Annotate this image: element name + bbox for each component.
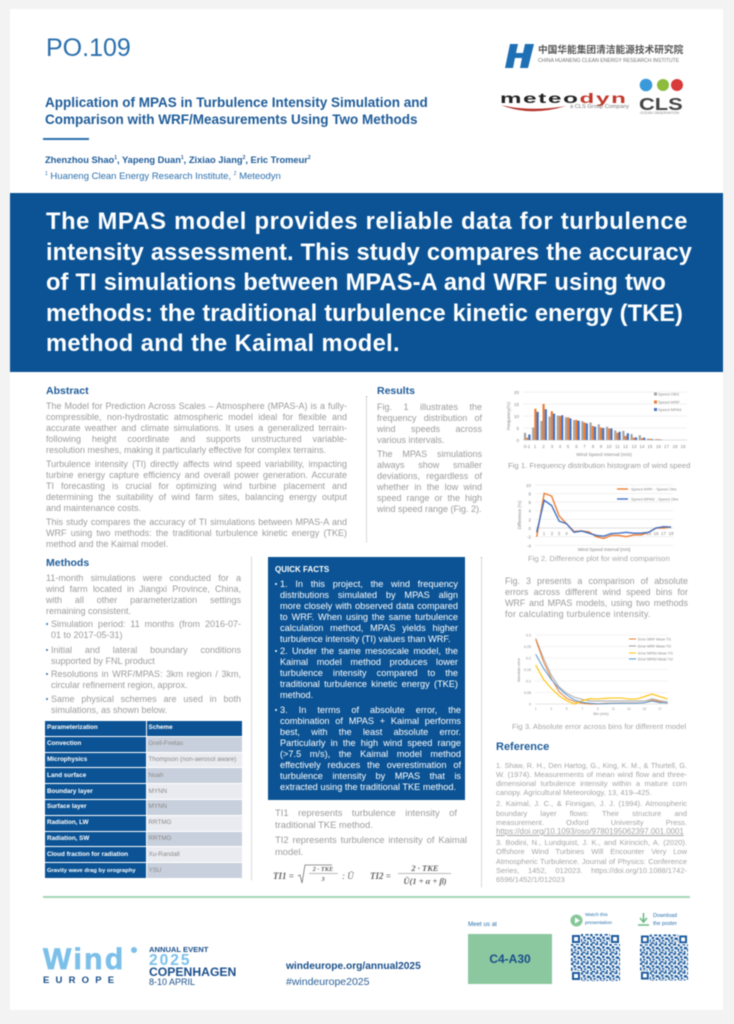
chart: figure 1 frequency histogram: 2 — [542, 444, 545, 449]
chart: figure 1 frequency histogram: Speed OBS — [658, 392, 679, 396]
abstract text: accurate weather and climate simulations. It uses a generalized terrain- — [46, 423, 347, 433]
methods text: Resolutions in WRF/MPAS: 3km region / 3km, — [51, 669, 241, 679]
quick fact 3 — [275, 704, 461, 792]
reference list: 6596/1452/1/012023 — [496, 875, 565, 884]
results text: speed range or the high — [377, 493, 482, 503]
website: windeurope.org/annual2025 — [286, 961, 421, 972]
CLS tagline: OCEAN OBSERVATION — [640, 111, 679, 115]
chart: figure 1 frequency histogram: 12 — [623, 444, 628, 449]
quick fact 3: best, with the least absolute error. — [280, 726, 461, 736]
chart: figure 3 absolute error: Error MPAS Mean TI2 — [638, 657, 673, 661]
banner: key message: intensity assessment. This study compares the accuracy — [46, 240, 692, 266]
chart: figure 2 difference plot: 6 — [528, 500, 531, 505]
chart: figure 1 frequency histogram: 0 — [516, 438, 519, 443]
banner: key message — [10, 193, 723, 372]
poster number: PO.109 — [46, 34, 131, 62]
TI definitions text: TI1 represents turbulence intensity of — [275, 807, 457, 818]
chart: figure 2 difference plot: 4 — [565, 531, 568, 536]
table: parameterization schemes: RRTMG — [148, 819, 171, 826]
table: parameterization schemes: Scheme — [148, 724, 173, 731]
panel: abstract — [46, 385, 348, 549]
table: parameterization schemes: Xu-Randall — [148, 851, 180, 858]
panel: quick facts — [268, 557, 465, 800]
results text — [376, 402, 482, 514]
TI definitions text — [274, 807, 467, 857]
quick fact 2: method. — [280, 690, 313, 700]
figure 3 intro text: for calculating turbulence intensity. — [505, 608, 651, 618]
chart: figure 1 frequency histogram: 18 — [672, 444, 678, 449]
results text: always show smaller — [377, 460, 482, 470]
quick fact 1: calculation method, MPAS yields higher — [280, 622, 458, 632]
results text: wind speed range (Fig. 2). — [377, 504, 482, 514]
CLS letters: CLS — [639, 94, 683, 114]
reference list: Series, 1452, 012023. https://doi.org/10.1088/1742- — [496, 866, 687, 875]
chart: figure 3 absolute error: 13 — [627, 707, 631, 711]
wordmark: Wind: Wind — [43, 943, 126, 976]
table: parameterization schemes: Radiation, LW — [47, 819, 89, 826]
table: parameterization schemes: Convection — [47, 740, 81, 747]
title — [44, 94, 428, 128]
table: parameterization schemes: Parameterization — [47, 724, 98, 731]
reference list: measurement. Oxford University Press. — [496, 818, 687, 827]
icon: play — [570, 914, 584, 928]
chart: figure 1 frequency histogram: Wind Speed Interval (m/s) — [576, 452, 632, 458]
chart: figure 2 difference plot: 3 — [558, 531, 561, 536]
affiliations: 1 Huaneng Clean Energy Research Institute, 2 Meteodyn — [45, 171, 281, 182]
download label: Download — [653, 913, 677, 919]
table: parameterization schemes: MYNN — [148, 788, 167, 795]
chart: figure 2 difference plot: Difference (%) — [517, 500, 522, 529]
chart: figure 1 frequency histogram: 3 — [551, 444, 554, 449]
figure 3 intro text — [504, 576, 688, 620]
table: parameterization schemes: Grell-Freitas — [148, 740, 183, 747]
table: parameterization schemes — [44, 720, 243, 879]
chart: figure 1 frequency histogram: 5 — [567, 444, 570, 449]
chart: figure 1 frequency histogram: 7 — [583, 444, 586, 449]
chart: figure 3 absolute error: 17 — [658, 707, 662, 711]
chart: figure 2 difference plot: 18 — [668, 531, 674, 536]
table: parameterization schemes: Surface layer — [47, 803, 87, 810]
table: parameterization schemes: RRTMG — [148, 835, 171, 842]
table: parameterization schemes: Noah — [148, 772, 164, 779]
chart: figure 3 absolute error: Bin (m/s) — [593, 712, 609, 716]
quick fact 3: effectively reduces the overestimation of — [280, 760, 461, 770]
chart: figure 1 frequency histogram: 14 — [639, 444, 645, 449]
chart: figure 2 difference plot: 2 — [528, 517, 531, 522]
figure 3 intro text: WRF and MPAS models, using two methods — [505, 598, 688, 608]
abstract text: Turbulence intensity (TI) directly affects wind speed variability, impacting — [46, 459, 347, 469]
quick facts heading: QUICK FACTS — [275, 565, 329, 574]
icon: download — [637, 912, 650, 926]
formulas: 2 · TKE — [410, 863, 439, 873]
abstract text: turbine energy capture efficiency and overall power generation. Accurate — [46, 470, 347, 480]
banner: key message: of TI simulations between MPAS-A and WRF using two — [46, 270, 666, 296]
chart: figure 2 difference plot: -2 — [527, 535, 531, 540]
reference list — [496, 760, 688, 884]
quick fact 3: turbulence intensity by MPAS that is — [280, 770, 461, 780]
reference list: Offshore Wind Turbines Will Encounter Very Low — [496, 847, 687, 856]
results text: wind speeds across — [377, 424, 482, 434]
results text: frequency distribution of — [377, 413, 482, 423]
chart: figure 2 difference plot: 2 — [551, 531, 554, 536]
methods text: simulations, as shown below. — [51, 705, 167, 715]
wordmark: meteodyn — [500, 90, 627, 106]
chart: figure 3 absolute error: Error WRF Mean TI2 — [638, 644, 671, 648]
table: parameterization schemes: Thompson (non-aerosol aware) — [148, 756, 236, 763]
chart: figure 1 frequency histogram: 10 — [514, 414, 519, 419]
watch label — [584, 912, 612, 926]
chart: figure 3 absolute error: Absolute error — [517, 657, 521, 682]
abstract text: This study compares the accuracy of TI simulations between MPAS-A and — [46, 517, 347, 527]
formulas: : Ū — [342, 871, 354, 881]
chart: figure 2 difference plot: Wind Speed Interval [m/s] — [578, 547, 630, 552]
methods text: Simulation period: 11 months (from 2016-07- — [51, 619, 241, 629]
banner: key message: The MPAS model provides reliable data for turbulence — [46, 209, 688, 235]
results text: Fig. 1 illustrates the — [377, 402, 482, 412]
chart: figure 2 difference plot: 4 — [528, 509, 531, 514]
download label — [652, 912, 678, 927]
Chinese name: 中国华能集团清洁能源技术研究院 — [538, 45, 683, 56]
chart: figure 3 absolute error: 0.3 — [526, 634, 531, 638]
chart: figure 1 frequency histogram: 8 — [592, 444, 595, 449]
table: parameterization schemes: Gravity wave drag by orography — [47, 868, 136, 874]
watch label: Watch this — [585, 913, 608, 918]
logo: China Huaneng — [504, 43, 684, 69]
hashtag: #windeurope2025 — [286, 976, 370, 988]
heading: reference: Reference — [496, 741, 549, 753]
quick fact 2: turbulence intensity compared to the — [280, 668, 458, 678]
download label: the poster — [653, 921, 677, 927]
quick fact 3: (>7.5 m/s), the Kaimal model method — [280, 748, 461, 758]
chart: figure 1 frequency histogram: 11 — [615, 444, 620, 449]
quick fact 3: 3. In terms of absolute error, the — [280, 704, 461, 714]
quick fact 3: combination of MPAS + Kaimal performs — [280, 716, 461, 726]
caption: figure 3: Fig 3. Absolute error across bins for different model — [512, 722, 686, 731]
authors: Zhenzhou Shao1, Yapeng Duan1, Zixiao Jiang2, Eric Tromeur2 — [45, 155, 311, 165]
reference list: 1. Shaw, R. H., Den Hartog, G., King, K. M., & Thurtell, G. — [496, 760, 687, 770]
quick fact 2 — [275, 646, 458, 700]
title: Comparison with WRF/Measurements Using Two Methods — [45, 112, 418, 126]
methods text: with all other parameterization settings — [46, 595, 241, 605]
panel: results text — [376, 385, 482, 514]
formulas: 2 · TKE — [312, 866, 334, 873]
quick fact 1: 1. In this project, the wind frequency — [280, 578, 458, 588]
icon: Huaneng H mark — [504, 43, 535, 69]
chart: figure 3 absolute error: 0.2 — [526, 656, 531, 660]
quick fact 1: to WRF. When using the same turbulence — [280, 612, 458, 622]
formulas: Ū(1 + α + β) — [403, 876, 447, 886]
abstract text: compressible, non-hydrostatic atmospheric model ideal for flexible and — [46, 412, 347, 422]
methods text: 11-month simulations were conducted for a — [46, 573, 241, 583]
quick fact 2: traditional turbulence kinetic energy (TKE) — [280, 678, 458, 688]
wind dot — [131, 947, 137, 953]
results text: whether in the low wind — [377, 482, 482, 492]
table: parameterization schemes: Boundary layer — [47, 788, 93, 795]
TI definitions text: traditional TKE method. — [275, 819, 373, 830]
TI definitions text: model. — [275, 846, 303, 857]
title: Application of MPAS in Turbulence Intensity Simulation and — [45, 94, 428, 110]
chart: figure 1 frequency histogram: 17 — [664, 444, 669, 449]
chart: figure 1 frequency histogram: 15 — [514, 402, 519, 407]
chart: figure 2 difference plot: 8 — [528, 492, 531, 496]
chart: figure 2 difference plot: 1 — [543, 531, 546, 536]
abstract text: following height coordinate and supports unstructured variable- — [46, 434, 347, 444]
reference list: canopy. Agricultural Meteorology, 13, 419–425. — [496, 788, 652, 797]
chart: figure 1 frequency histogram: Speed MPAS — [658, 407, 682, 412]
abstract text: WRF using two methods: the traditional turbulence kinetic energy (TKE) — [46, 528, 347, 538]
reference list: https://doi.org/10.1093/oso/9780195062397.001.0001 — [496, 827, 684, 836]
quick fact 1: turbulence intensity (TI) values than WRF. — [280, 634, 451, 644]
chart: figure 3 absolute error: 0.15 — [524, 668, 531, 672]
chart: figure 3 absolute error: 7 — [581, 707, 583, 711]
results text: deviations, regardless of — [377, 471, 482, 481]
English name: CHINA HUANENG CLEAN ENERGY RESEARCH INSTITUTE — [538, 58, 679, 64]
formulas: TI1 = — [273, 871, 294, 881]
chart: figure 3 absolute error: Error MPAS Mean TI1 — [638, 651, 673, 655]
chart: figure 2 difference plot: Speed MPAS - Speed Obs — [631, 496, 678, 502]
chart: figure 1 frequency histogram: 13 — [631, 444, 637, 449]
quick fact 1: distributions simulated by MPAS align — [280, 590, 458, 600]
abstract text: and maintenance costs. — [46, 503, 141, 513]
methods text: wind farm located in Jiangxi Province, China, — [46, 584, 241, 594]
formulas: 3 — [320, 876, 325, 883]
caption: figure 2: Fig 2. Difference plot for wind comparison — [528, 554, 670, 563]
chart: figure 1 frequency histogram: 19 — [680, 444, 686, 449]
event links — [285, 960, 422, 988]
chart: figure 1 frequency histogram: 15 — [647, 444, 653, 449]
chart: figure 2 difference plot: 15 — [646, 531, 652, 536]
table: parameterization schemes: Cloud fraction for radiation — [47, 851, 128, 858]
meet us label: Meet us at — [468, 921, 497, 928]
chart: figure 1 frequency histogram: 1 — [534, 444, 537, 449]
table: parameterization schemes: Microphysics — [47, 756, 87, 763]
abstract text: determining the suitability of wind farm sites, balancing energy output — [46, 492, 347, 502]
year: 2025 — [149, 952, 191, 969]
figure 3 intro text: Fig. 3 presents a comparison of absolute — [505, 576, 688, 586]
results text: various intervals. — [377, 435, 445, 445]
three circles — [639, 78, 684, 92]
methods text: circular refinement region, approx. — [51, 680, 188, 690]
quick fact 3: extracted using the traditional TKE method. — [280, 782, 456, 792]
reference list: 2. Kaimal, J. C., & Finnigan, J. J. (1994). Atmospheric — [496, 799, 687, 808]
chart: figure 3 absolute error: 0 — [529, 702, 531, 706]
table: parameterization schemes: Radiation, SW — [47, 835, 89, 842]
booth box — [468, 934, 552, 984]
quick fact 1: more closely with observed data compared — [280, 600, 458, 610]
chart: figure 2 difference plot: 10 — [526, 483, 531, 488]
chart: figure 3 absolute error: 0.1 — [526, 680, 531, 684]
chart: figure 1 frequency histogram: 0-1 — [524, 444, 531, 449]
logo: CLS — [639, 78, 684, 115]
reference list: W. (1974). Measurements of mean wind flow and three- — [496, 770, 687, 779]
abstract text: method and the Kaimal model. — [46, 539, 168, 549]
panel: methods — [45, 557, 242, 715]
table: parameterization schemes: MYNN — [148, 803, 167, 810]
abstract text: TI forecasting is crucial for optimizing wind turbine placement and — [46, 481, 347, 491]
reference list: Atmospheric Turbulence. Journal of Physics: Conference — [496, 857, 687, 866]
QR code: watch — [570, 933, 621, 982]
chart: figure 1 frequency histogram: 16 — [656, 444, 661, 449]
chart: figure 3 absolute error: Error WRF Mean TI1 — [638, 637, 671, 641]
heading: abstract: Abstract — [46, 385, 89, 397]
table: parameterization schemes: Land surface — [47, 772, 86, 779]
methods text — [45, 573, 242, 715]
figure 3 intro text: errors across different wind speed bins for — [505, 586, 688, 596]
tagline: a CLS Group Company — [570, 104, 629, 110]
panel: reference — [496, 741, 688, 884]
quick fact 3: Particularly in the high wind speed range — [280, 738, 461, 748]
abstract text: The Model for Prediction Across Scales – Atmosphere (MPAS-A) is a fully- — [46, 401, 347, 411]
methods text: remaining consistent. — [46, 606, 131, 616]
booth box: C4-A30 — [489, 952, 531, 966]
TI definitions text: TI2 represents turbulence intensity of Kaimal — [275, 834, 467, 845]
methods text: supported by FNL product — [51, 656, 155, 666]
chart: figure 2 difference plot: 17 — [661, 531, 666, 536]
annual event: ANNUAL EVENT — [149, 945, 208, 954]
chart: figure 3 absolute error: 1 — [535, 707, 537, 711]
banner: key message: method and the Kaimal model. — [46, 331, 400, 357]
chart: figure 1 frequency histogram: 5 — [516, 426, 519, 431]
watch label: presentation — [585, 921, 612, 926]
formulas: TI2 = — [370, 871, 391, 881]
table: parameterization schemes: YSU — [148, 867, 161, 874]
abstract text: resolution meshes, making it particularly effective for complex terrains. — [46, 445, 326, 455]
chart: figure 3 absolute error: 5 — [566, 707, 568, 711]
chart: figure 3 absolute error: 11 — [612, 707, 615, 711]
reference list: dimensional turbulence intensity within a mature corn — [496, 779, 687, 788]
banner: key message: methods: the traditional turbulence kinetic energy (TKE) — [46, 301, 683, 327]
chart: figure 1 frequency histogram: 10 — [606, 444, 612, 449]
chart: figure 1 frequency histogram: 6 — [575, 444, 578, 449]
chart: figure 2 difference plot: Speed WRF - Speed Obs — [631, 486, 676, 492]
chart: figure 1 frequency histogram: 20 — [514, 390, 519, 395]
chart: figure 3 absolute error: 0.05 — [524, 691, 531, 695]
quick fact 2: 2. Under the same mesoscale model, the — [280, 646, 458, 656]
abstract text — [46, 401, 348, 549]
city: COPENHAGEN — [149, 965, 236, 979]
logo: Meteodyn — [500, 90, 630, 112]
chart: figure 2 difference plot: -4 — [527, 543, 531, 548]
quick fact 1 — [275, 578, 458, 644]
QR code: download — [639, 934, 689, 982]
wordmark: Europe: EUROPE — [43, 975, 120, 986]
event details — [148, 945, 236, 987]
chart: figure 1 frequency histogram: Frequency(%) — [506, 401, 511, 430]
methods text: 01 to 2017-05-31) — [51, 630, 123, 640]
methods text: Initial and lateral boundary conditions — [51, 645, 241, 655]
reference list: boundary layer flows: Their structure and — [496, 809, 687, 818]
chart: figure 1 frequency histogram: 9 — [600, 444, 603, 449]
swoosh — [502, 104, 566, 112]
chart: figure 2 difference plot: 0 — [528, 526, 531, 531]
dates: 8-10 APRIL — [149, 977, 195, 987]
chart: figure 1 frequency histogram: Speed WRF — [658, 400, 680, 404]
chart: figure 1 frequency histogram: 4 — [559, 444, 562, 449]
chart: figure 3 absolute error: 15 — [642, 707, 646, 711]
logo: WindEurope — [42, 943, 138, 986]
quick fact 2: Kaimal model method produces lower — [280, 656, 458, 666]
chart: figure 3 absolute error: 3 — [550, 707, 552, 711]
chart: figure 3 absolute error: 9 — [597, 707, 599, 711]
heading: results: Results — [377, 385, 415, 397]
reference list: 3. Bodini, N., Lundquist, J. K., and Kirincich, A. (2020). — [496, 838, 687, 847]
results text: The MPAS simulations — [377, 449, 482, 459]
chart: figure 3 absolute error: 0.25 — [524, 645, 531, 649]
heading: methods: Methods — [46, 557, 89, 569]
chart: figure 2 difference plot: 16 — [653, 531, 659, 536]
caption: figure 1: Fig 1. Frequency distribution histogram of wind speed — [508, 461, 690, 470]
methods text: Same physical schemes are used in both — [51, 694, 241, 704]
